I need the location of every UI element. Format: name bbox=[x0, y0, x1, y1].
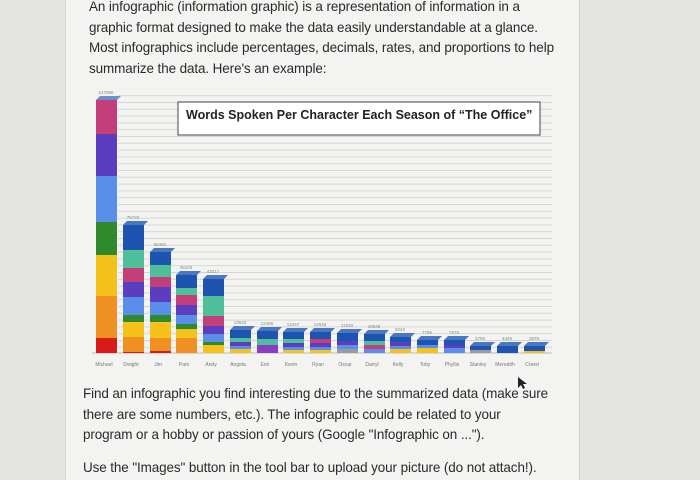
value labels: 147096 bbox=[98, 90, 114, 95]
value labels: 43017 bbox=[207, 269, 220, 274]
character labels: Meredith bbox=[495, 362, 515, 368]
value labels: 10845 bbox=[368, 324, 381, 329]
value labels: 7785 bbox=[422, 330, 433, 335]
icon: mouse cursor bbox=[518, 377, 527, 389]
character labels: Michael bbox=[95, 362, 113, 368]
value labels: 12447 bbox=[287, 322, 300, 327]
character labels: Ryan bbox=[312, 362, 324, 368]
character labels: Stanley bbox=[470, 362, 487, 368]
character labels: Oscar bbox=[338, 362, 352, 368]
character labels: Pam bbox=[179, 362, 189, 368]
value labels: 9242 bbox=[395, 327, 406, 332]
value labels: 4349 bbox=[502, 336, 513, 341]
value labels: 58481 bbox=[154, 242, 167, 247]
character labels: Darryl bbox=[365, 362, 379, 368]
value labels: 3706 bbox=[475, 336, 486, 341]
page card bbox=[65, 0, 580, 480]
instructions text: program or a hobby or passion of yours (Google "Infographic on ..."). bbox=[83, 427, 484, 442]
value labels: 75733 bbox=[127, 215, 140, 220]
character labels: Kevin bbox=[285, 362, 297, 368]
character labels: Andy bbox=[205, 362, 217, 368]
bar: Andy bbox=[203, 275, 228, 353]
instructions text bbox=[83, 386, 548, 442]
intro text: summarize the data. Here's an example: bbox=[89, 60, 326, 76]
character labels bbox=[95, 362, 539, 368]
value labels: 7575 bbox=[449, 330, 460, 335]
intro text bbox=[89, 0, 554, 76]
intro text: Most infographics include percentages, decimals, rates, and proportions to help bbox=[89, 40, 554, 55]
value labels: 12496 bbox=[261, 321, 274, 326]
bar: Pam bbox=[176, 271, 201, 353]
character labels: Jim bbox=[154, 362, 162, 368]
bar: Jim bbox=[150, 248, 175, 353]
character labels: Erin bbox=[261, 362, 270, 368]
instructions text: Find an infographic you find interesting due to the summarized data (make sure bbox=[83, 386, 548, 401]
character labels: Kelly bbox=[393, 362, 404, 368]
value labels: 3878 bbox=[529, 336, 540, 341]
small bars bbox=[230, 326, 549, 353]
upload note: Use the "Images" button in the tool bar to upload your picture (do not attach!). bbox=[83, 460, 536, 475]
instructions text: there are some numbers, etc.). The infographic could be related to your bbox=[83, 406, 501, 422]
intro text: graphic format designed to make the data easily understandable at a glance. bbox=[89, 20, 538, 34]
value labels bbox=[98, 90, 540, 341]
value labels: 12046 bbox=[314, 322, 327, 327]
character labels: Angela bbox=[230, 362, 246, 368]
value labels: 11930 bbox=[341, 323, 354, 328]
character labels: Phyllis bbox=[445, 362, 460, 368]
bar: Dwight bbox=[123, 221, 148, 353]
character labels: Dwight bbox=[123, 362, 139, 368]
character labels: Creed bbox=[525, 362, 539, 368]
value labels: 13630 bbox=[234, 320, 247, 325]
chart title box bbox=[178, 102, 540, 135]
bar: Michael bbox=[96, 96, 121, 353]
character labels: Toby bbox=[420, 362, 431, 368]
value labels: 45433 bbox=[180, 265, 193, 270]
chart title box: Words Spoken Per Character Each Season of “The Office” bbox=[186, 108, 532, 122]
